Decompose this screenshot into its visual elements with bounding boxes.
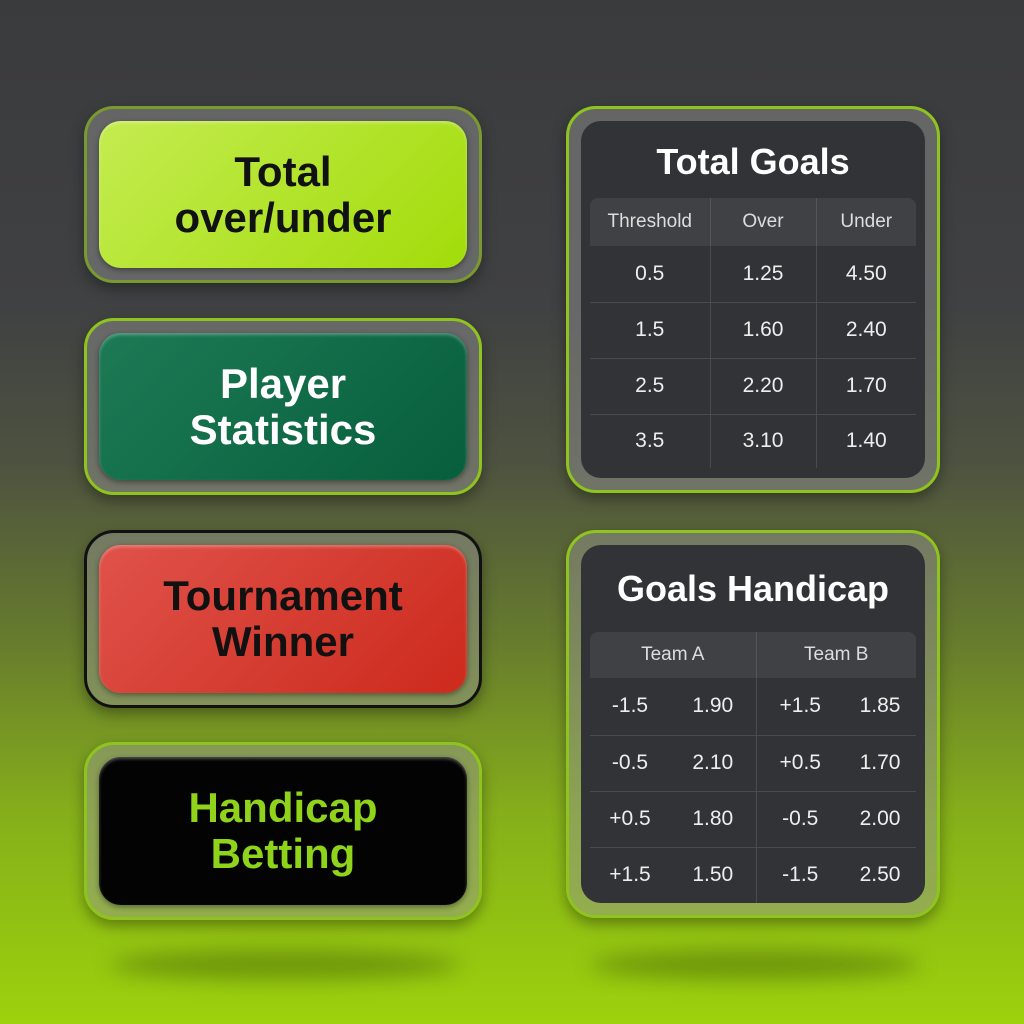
table: handicap odds: +0.5 [609, 807, 651, 830]
panel: Total Goals [566, 106, 940, 493]
button: Tournament Winner: Tournament [163, 572, 403, 619]
button: Player Statistics [84, 318, 482, 495]
panel: Goals Handicap [566, 530, 940, 918]
table: total goals odds: 1.70 [846, 374, 887, 397]
table: total goals odds: 3.5 [635, 429, 664, 452]
button: Total over/under [84, 106, 482, 283]
table: handicap odds: 2.50 [860, 863, 900, 886]
table: total goals odds: 3.10 [743, 429, 783, 452]
table: handicap odds: -0.5 [782, 807, 818, 830]
table: total goals odds: 4.50 [846, 262, 887, 285]
table: handicap odds: +0.5 [780, 751, 821, 774]
button: Total over/under: Total [234, 148, 332, 194]
button: Total over/under: over/under [174, 194, 392, 240]
table: handicap odds: 1.90 [692, 694, 733, 717]
table: handicap odds [590, 632, 916, 903]
table: handicap odds: -1.5 [612, 694, 648, 717]
button: Tournament Winner: Winner [212, 618, 354, 665]
table: handicap odds: -1.5 [782, 863, 818, 886]
button: Tournament Winner [84, 530, 482, 708]
table: total goals odds: 1.60 [743, 318, 783, 341]
table: handicap odds: 2.10 [692, 751, 733, 774]
table: handicap odds: +1.5 [780, 694, 821, 717]
button: Handicap Betting [84, 742, 482, 920]
table: total goals odds: 1.25 [743, 262, 783, 285]
table: total goals odds: 2.40 [846, 318, 887, 341]
table: handicap odds: 1.85 [860, 694, 900, 717]
button: Handicap Betting: Handicap [188, 784, 378, 831]
button: Handicap Betting: Betting [211, 830, 355, 877]
heading: Total Goals: Total Goals [656, 141, 850, 182]
table: total goals odds: Over [742, 211, 784, 232]
table: handicap odds: Team A [641, 644, 704, 665]
table: handicap odds: -0.5 [612, 751, 648, 774]
table: total goals odds: Under [840, 211, 892, 232]
button: Player Statistics: Statistics [190, 406, 376, 452]
table: total goals odds: 2.5 [635, 374, 664, 397]
table: total goals odds: Threshold [608, 211, 692, 232]
table: total goals odds: 0.5 [635, 262, 664, 285]
table: total goals odds: 1.5 [635, 318, 664, 341]
table: handicap odds: 2.00 [860, 807, 900, 830]
table: handicap odds: Team B [804, 644, 868, 665]
heading: Goals Handicap: Goals Handicap [617, 568, 889, 609]
table: handicap odds: 1.70 [860, 751, 900, 774]
table: handicap odds: 1.80 [692, 807, 733, 830]
table: total goals odds: 1.40 [846, 429, 887, 452]
table: handicap odds: 1.50 [692, 863, 733, 886]
table: total goals odds: 2.20 [743, 374, 783, 397]
table: total goals odds [590, 198, 916, 468]
table: handicap odds: +1.5 [609, 863, 651, 886]
button: Player Statistics: Player [220, 360, 346, 406]
